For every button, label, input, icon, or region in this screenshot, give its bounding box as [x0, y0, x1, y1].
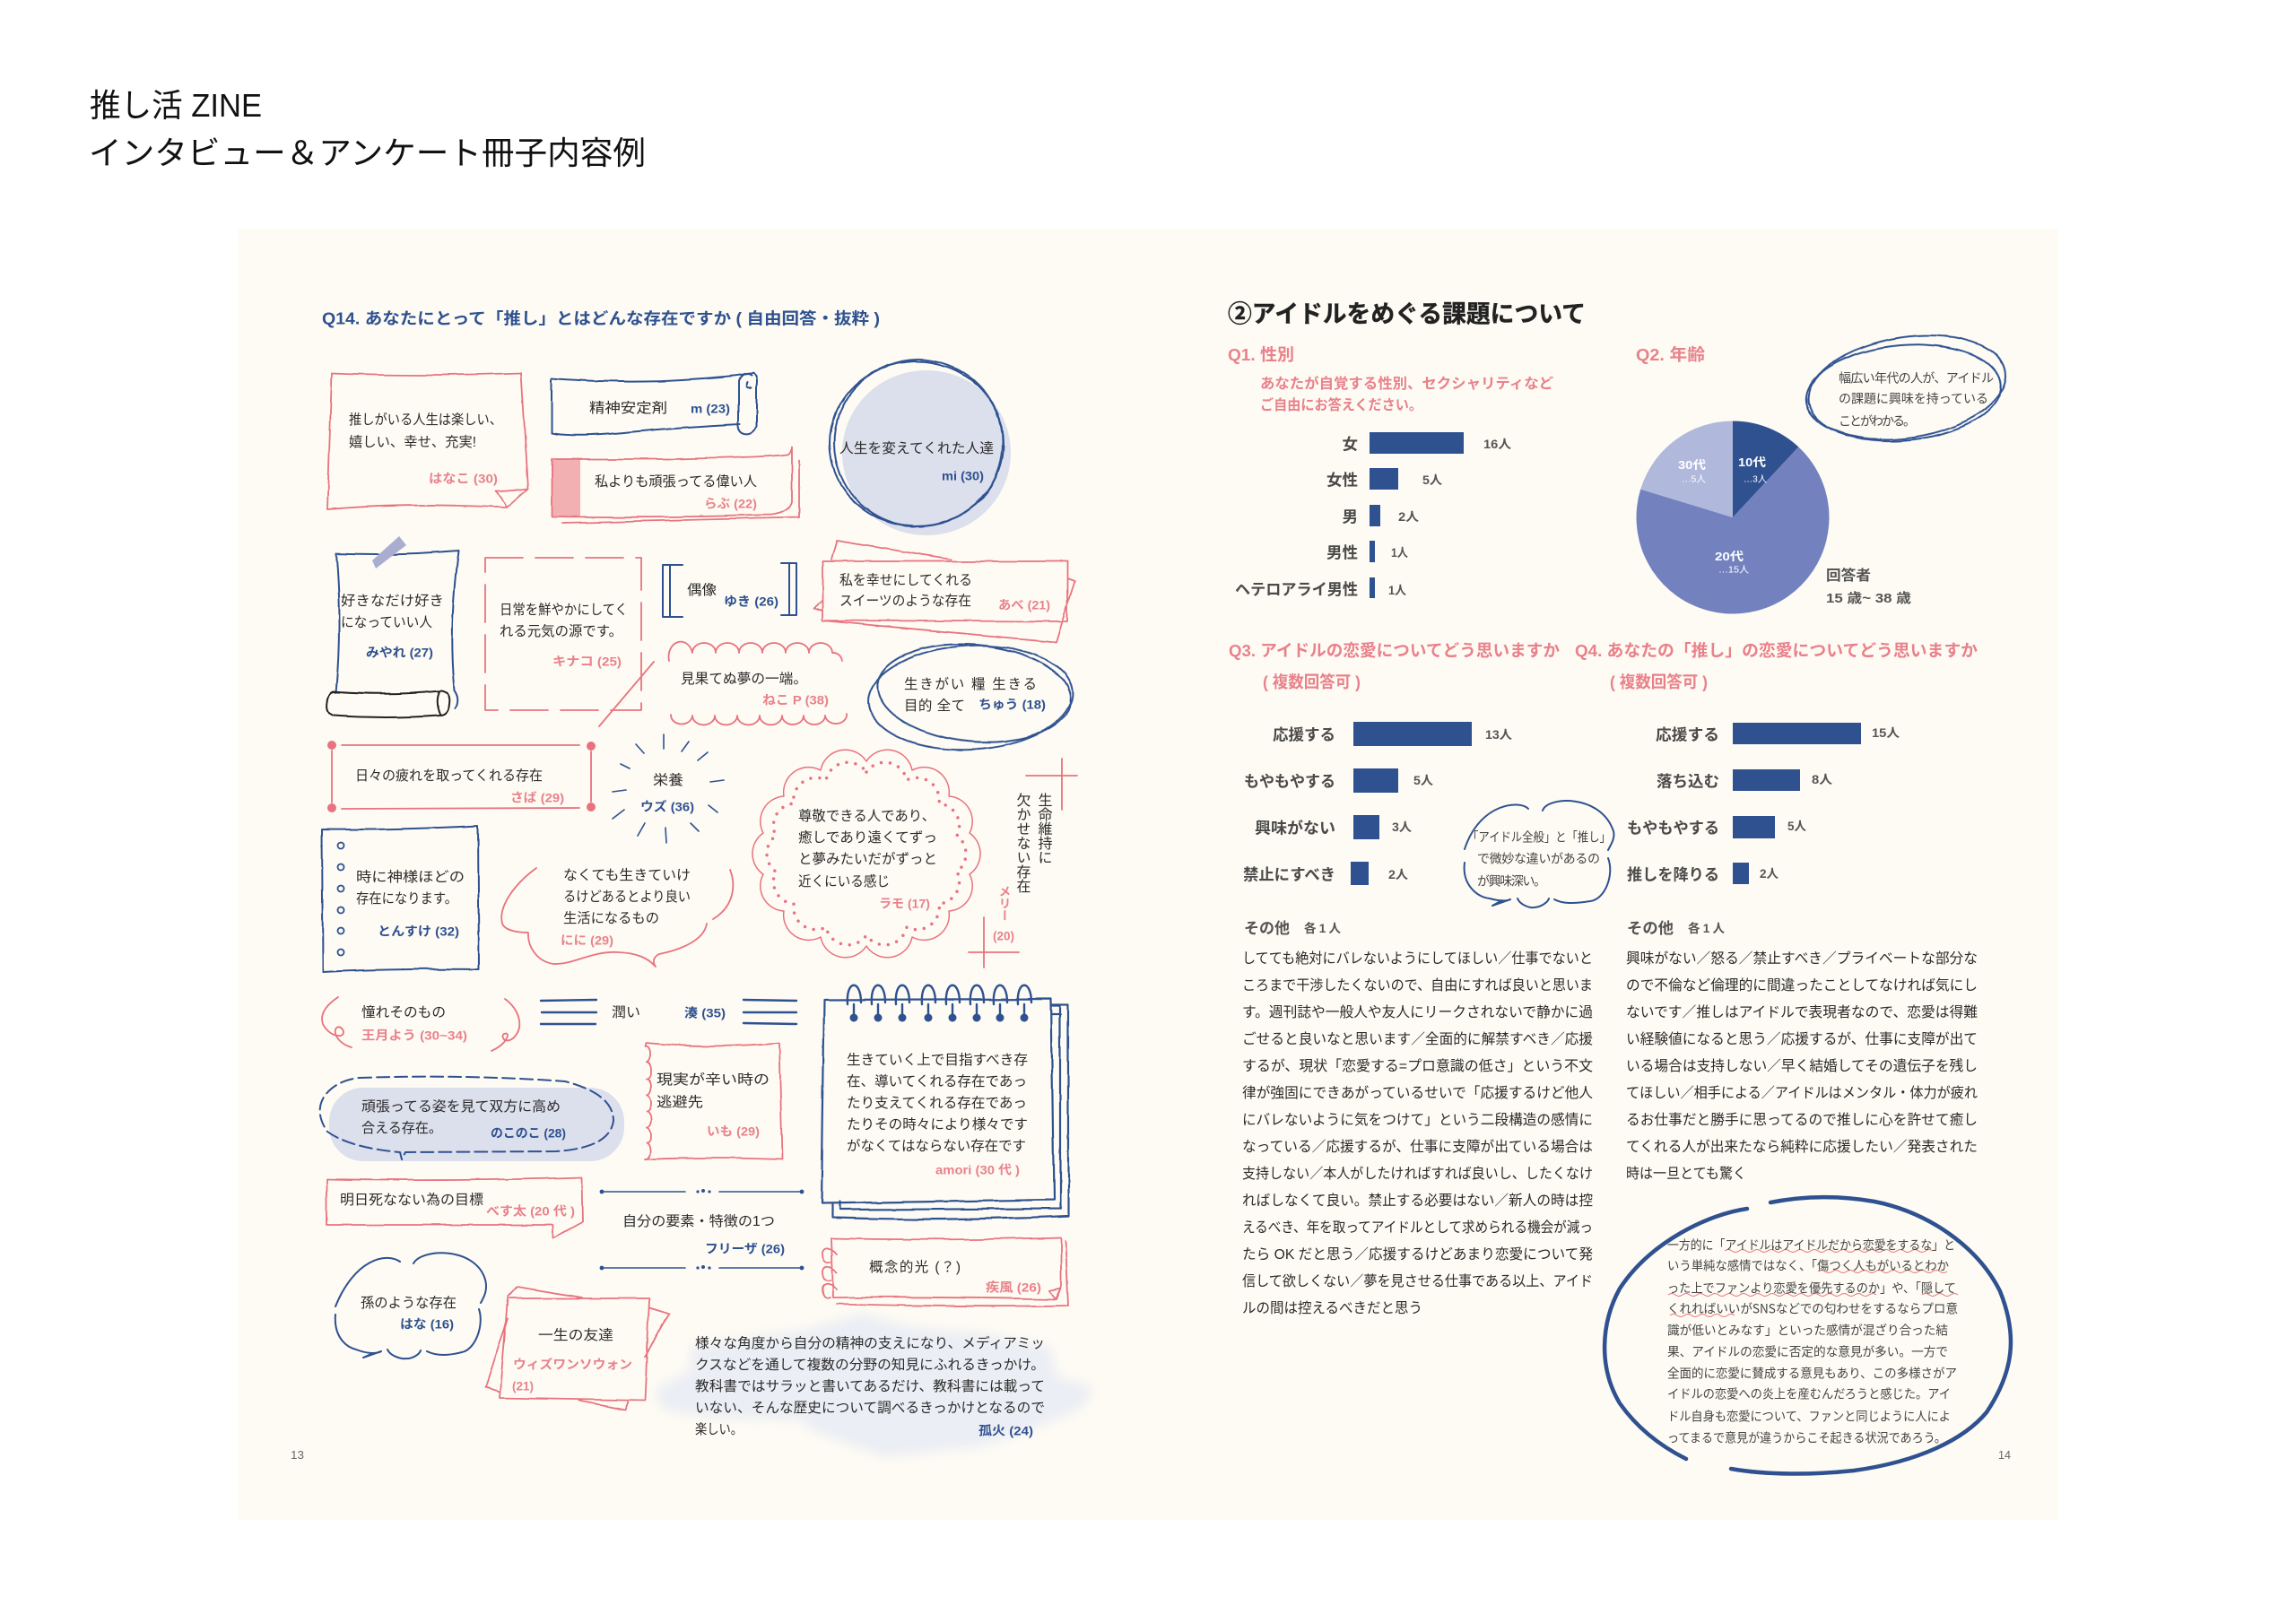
- panel: Q2 age: [1636, 345, 1911, 614]
- card: ちゅう double oval: ちゅう (18): [978, 698, 1046, 712]
- card: mi circle: [826, 352, 1011, 535]
- card: のこのこ dashed bubble on shade: [320, 1077, 624, 1161]
- text block: Q3 other answers: たら OK だと思う／応援するけどあまり恋愛について発: [1242, 1246, 1593, 1263]
- heading: Q14: Q14. あなたにとって「推し」とはどんな存在ですか ( 自由回答・抜粋 ): [322, 308, 880, 328]
- bar chart: gender: 女性: [1326, 472, 1358, 490]
- panel: Q1 gender: Q1. 性別: [1228, 345, 1294, 364]
- card: ウィズワンソウォン stacked papers: (21): [512, 1379, 534, 1393]
- card: キナコ dashed box: れる元気の源です。: [500, 623, 622, 639]
- pie chart: age: 30代: [1678, 458, 1706, 472]
- card: フリーザ ruled lines: [600, 1189, 804, 1270]
- bar chart: gender: 1人: [1388, 584, 1406, 597]
- callout: large handwritten oval summary: イドルの恋愛への炎上を産むんだろうと感じた。アイ: [1667, 1384, 1951, 1402]
- card: mi circle: 人生を変えてくれた人達: [839, 440, 994, 456]
- card: らぶ: 私よりも頑張ってる偉い人: [595, 473, 757, 490]
- bar chart: gender: ヘテロアライ男性: [1235, 581, 1358, 599]
- bar chart: gender: 1人: [1391, 546, 1408, 560]
- callout: large handwritten oval summary: 全面的に恋愛に賛成する意見もあり、この多様さがア: [1667, 1365, 1957, 1383]
- card: ラモ scalloped cloud: 尊敬できる人であり、: [798, 808, 935, 824]
- card: あべ stacked papers: スイーツのような存在: [839, 593, 971, 609]
- bar chart: gender: 男: [1342, 508, 1358, 525]
- card: キナコ dashed box: 日常を鮮やかにしてく: [500, 602, 628, 618]
- text block: Q3 other answers: なっている／応援するが、仕事に支障が出ている場合は: [1242, 1139, 1593, 1155]
- callout: large handwritten oval summary: 識が低いとみなす」といった感情が混ざり合った結: [1667, 1322, 1948, 1340]
- callout: cloud comment: で微妙な違いがあるの: [1477, 850, 1600, 868]
- text block: Q3 other answers: ればしなくて良い。禁止する必要はない／新人の時は控: [1242, 1193, 1593, 1209]
- card: のこのこ dashed bubble on shade: のこのこ (28): [491, 1126, 566, 1141]
- text block: Q3 other answers: ころまで干渉したくないので、自由にすれば良いと思いま: [1242, 977, 1593, 994]
- card: amori spiral notebook: amori (30 代 ): [935, 1162, 1020, 1176]
- card: amori spiral notebook: 生きていく上で目指すべき存: [847, 1052, 1028, 1068]
- pie chart: age: 10代: [1738, 456, 1766, 469]
- bar chart: Q3: 2人: [1388, 868, 1409, 881]
- card: 湊 three-line rules: [541, 1000, 796, 1024]
- bar chart: Q4: 推しを降りる: [1627, 866, 1719, 884]
- panel: booklet spread background: [238, 229, 2058, 1520]
- panel: Q3: [1229, 641, 1560, 885]
- card: あべ stacked papers: 私を幸せにしてくれる: [839, 572, 972, 588]
- card: いも torn-edge note: 逃避先: [657, 1094, 703, 1110]
- card: キナコ dashed box: キナコ (25): [552, 655, 622, 669]
- card: べす太 ribbon: 明日死なない為の目標: [340, 1192, 483, 1208]
- text block: Q4 other answers: てほしい／相手による／アイドルはメンタル・体力が疲れ: [1626, 1085, 1978, 1101]
- card: いも torn-edge note: 現実が辛い時の: [657, 1072, 770, 1088]
- panel: Q1 gender: [1228, 345, 1553, 599]
- card: はなこ: 嬉しい、幸せ、充実!: [349, 434, 476, 450]
- card: ウズ radiating lines: ウズ (36): [640, 800, 694, 814]
- bar chart: gender: 2人: [1398, 510, 1420, 524]
- text block: Q3 other answers: 各1人: [1304, 921, 1342, 935]
- card: みやれ paper with tape: になっていい人: [341, 614, 432, 630]
- bar chart: Q3: 応援する: [1273, 726, 1335, 744]
- bar chart: gender: [1235, 432, 1512, 599]
- text block: Q3 other answers: す。週刊誌や一般人や友人にリークされないで静かに過: [1242, 1004, 1593, 1020]
- card: ウィズワンソウォン stacked papers: ウィズワンソウォン: [513, 1358, 632, 1372]
- pie chart: age: …15人: [1718, 565, 1750, 576]
- text block: Q3 other answers: [1242, 920, 1593, 1316]
- text block: Q3 other answers: えるべき、年を取ってアイドルとして求められる機会が減っ: [1242, 1219, 1593, 1236]
- card: ウズ radiating lines: 栄養: [653, 772, 683, 788]
- card: 疾風 ringed note: [822, 1237, 1068, 1306]
- bar chart: Q3: 興味がない: [1255, 820, 1335, 838]
- heading: section 2: ②アイドルをめぐる課題について: [1228, 301, 1586, 328]
- card: とんすけ notepad: 存在になります。: [356, 890, 457, 907]
- text block: Q4 other answers: ないです／推しはアイドルで表現者なので、恋愛は得難: [1626, 1004, 1978, 1020]
- card: みやれ paper with tape: [327, 536, 458, 717]
- card: いも torn-edge note: [645, 1043, 782, 1159]
- panel: Q4: ( 複数回答可 ): [1610, 673, 1708, 691]
- card: 弧火 long answer on shade: クスなどを通して複数の分野の知見にふれるきっかけ。: [695, 1357, 1045, 1373]
- card: 湊 three-line rules: 潤い: [612, 1004, 640, 1020]
- text block: Q3 other answers: にバレないように気をつけて」という二段構造の感情に: [1242, 1112, 1593, 1128]
- title: [89, 87, 646, 171]
- card: メリー vertical text with crosshairs: [969, 759, 1077, 968]
- card: 王月よう curly parentheses: [322, 997, 519, 1051]
- card: みやれ paper with tape: 好きなだけ好き: [341, 593, 444, 609]
- card: ちゅう double oval: [865, 637, 1075, 755]
- card: フリーザ ruled lines: 自分の要素・特徴の1つ: [622, 1213, 775, 1229]
- bar chart: gender: 5人: [1422, 473, 1443, 487]
- card: ラモ scalloped cloud: ラモ (17): [879, 897, 930, 911]
- text block: Q3 other answers: ごせると良いなと思います／全面的に解禁すべき／応援: [1242, 1031, 1593, 1047]
- text block: Q4 other answers: [1626, 920, 1978, 1182]
- bar chart: Q4: 落ち込む: [1657, 773, 1719, 791]
- card: さば pinned frame: [327, 741, 596, 812]
- card: 弧火 long answer on shade: 楽しい。: [695, 1421, 743, 1437]
- text block: Q4 other answers: い経験値になると思う／応援するが、仕事に支障が出て: [1626, 1031, 1978, 1047]
- callout: large handwritten oval summary: ドル自身も恋愛について、ファンと同じように人によ: [1667, 1408, 1951, 1426]
- text block: Q4 other answers: ので不倫など倫理的に間違ったことしてなければ気にし: [1626, 977, 1978, 994]
- text block: Q3 other answers: ルの間は控えるべきだと思う: [1242, 1300, 1422, 1316]
- bar chart: Q4: 8人: [1812, 773, 1833, 786]
- card: ラモ scalloped cloud: 癒しであり遠くてずっ: [798, 829, 937, 846]
- callout: large handwritten oval summary: くれればいいがSNSなどでの匂わせをするならプロ意: [1667, 1300, 1958, 1318]
- text block: Q3 other answers: 信して欲しくない／夢を見させる仕事である以上、アイド: [1242, 1273, 1593, 1289]
- card: べす太 ribbon: べす太 (20 代 ): [486, 1203, 575, 1218]
- text block: Q3 other answers: するが、現状「恋愛する=プロ意識の低さ」という不文: [1242, 1058, 1593, 1074]
- callout: age comment oval: の課題に興味を持っている: [1839, 389, 1988, 407]
- card: とんすけ notepad: とんすけ (32): [378, 924, 459, 938]
- card: にに speech bubble: なくても生きていけ: [563, 867, 691, 883]
- text block: Q4 other answers: いる場合は支持しない／早く結婚してその遺伝子を残し: [1626, 1058, 1978, 1074]
- card: 弧火 long answer on shade: 孤火 (24): [978, 1424, 1033, 1438]
- card: amori spiral notebook: [822, 985, 1068, 1219]
- card: らぶ: [552, 447, 799, 523]
- card: メリー vertical text with crosshairs: 欠かせない存在: [1013, 793, 1031, 893]
- panel: Q1 gender: ご自由にお答えください。: [1260, 396, 1422, 413]
- card: ねこP scallop: ねこ P (38): [762, 692, 829, 707]
- callout: large handwritten oval summary: [1605, 1197, 2011, 1474]
- card: ウィズワンソウォン stacked papers: [485, 1287, 669, 1410]
- panel: Q1 gender: あなたが自覚する性別、セクシャリティなど: [1260, 375, 1553, 392]
- card: べす太 ribbon: [326, 1177, 583, 1238]
- card: m scroll: 精神安定剤: [589, 400, 667, 416]
- bar chart: Q4: [1627, 723, 1900, 884]
- card: とんすけ notepad: 時に神様ほどの: [356, 869, 465, 885]
- callout: age comment oval: [1801, 322, 2013, 453]
- card: いも torn-edge note: いも (29): [707, 1124, 760, 1139]
- bar chart: Q3: 禁止にすべき: [1243, 866, 1335, 884]
- callout: age comment oval: 幅広い年代の人が、アイドル: [1839, 369, 1994, 387]
- bar chart: Q4: 応援する: [1656, 726, 1719, 744]
- bar chart: Q4: もやもやする: [1627, 820, 1719, 838]
- card: にに speech bubble: [501, 867, 733, 967]
- card: にに speech bubble: 生活になるもの: [563, 910, 659, 926]
- panel: Q4: Q4. あなたの「推し」の恋愛についてどう思いますか: [1575, 641, 1979, 660]
- pie chart: age: …3人: [1744, 473, 1767, 484]
- card: みやれ paper with tape: みやれ (27): [366, 646, 433, 660]
- card: amori spiral notebook: たり支えてくれる存在であっ: [847, 1095, 1027, 1111]
- title: 推し活 ZINE: [90, 87, 262, 124]
- page number 14: 14: [1998, 1448, 2011, 1462]
- panel: Q4: [1575, 641, 1979, 884]
- card: キナコ dashed box: [485, 558, 654, 726]
- callout: cloud comment: が興味深い。: [1477, 872, 1546, 890]
- bar chart: Q4: 2人: [1760, 867, 1779, 881]
- card: にに speech bubble: にに (29): [561, 933, 613, 947]
- card: amori spiral notebook: たりその時々により様々です: [847, 1116, 1028, 1133]
- card: ちゅう double oval: 目的 全て: [904, 698, 965, 714]
- card: 疾風 ringed note: 概念的光 (？): [869, 1259, 961, 1275]
- card: ゆき brackets: 偶像: [687, 582, 717, 598]
- card: はなこ: はなこ (30): [429, 472, 498, 486]
- card: ねこP scallop: 見果てぬ夢の一端。: [681, 671, 807, 687]
- callout: large handwritten oval summary: ってまるで意見が違うからこそ起きる状況であろう。: [1667, 1429, 1946, 1447]
- card: 王月よう curly parentheses: 憧れそのもの: [361, 1004, 446, 1020]
- card: ちゅう double oval: 生きがい 糧 生きる: [904, 676, 1037, 692]
- bar chart: gender: 16人: [1483, 438, 1512, 451]
- card: 疾風 ringed note: 疾風 (26): [986, 1280, 1041, 1295]
- callout: cloud comment: [1465, 801, 1613, 907]
- text block: Q4 other answers: るお仕事だと勝手に思ってるので推しに心を許せて癒し: [1626, 1112, 1978, 1128]
- text block: Q4 other answers: 時は一旦とても驚く: [1626, 1166, 1746, 1182]
- card: のこのこ dashed bubble on shade: 合える存在。: [361, 1120, 442, 1136]
- bar chart: Q4: 5人: [1787, 820, 1806, 833]
- card: ラモ scalloped cloud: と夢みたいだがずっと: [798, 851, 937, 867]
- callout: large handwritten oval summary: った上でファンより恋愛を優先するのか」や、「隠して: [1667, 1279, 1956, 1297]
- card: あべ stacked papers: あべ (21): [998, 597, 1050, 612]
- card: はな cloud: 孫のような存在: [361, 1295, 457, 1311]
- title: インタビュー＆アンケート冊子内容例: [89, 135, 646, 171]
- card: ラモ scalloped cloud: 近くにいる感じ: [798, 873, 890, 890]
- text block: Q4 other answers: その他: [1627, 920, 1674, 937]
- card: さば pinned frame: 日々の疲れを取ってくれる存在: [355, 768, 543, 784]
- page number 13: 13: [291, 1448, 304, 1462]
- card: はな cloud: はな (16): [400, 1316, 454, 1331]
- card: さば pinned frame: さば (29): [510, 791, 564, 805]
- card: ゆき brackets: ゆき (26): [724, 594, 778, 608]
- bar chart: gender: 男性: [1326, 543, 1358, 561]
- card: あべ stacked papers: [813, 541, 1074, 642]
- card: 弧火 long answer on shade: 教科書ではサラッと書いてあるだけ、教科書には載って: [695, 1378, 1045, 1394]
- pie chart: age: 20代: [1715, 550, 1744, 563]
- callout: cloud comment: 「アイドル全般」と「推し」: [1467, 829, 1611, 846]
- panel: Q3: ( 複数回答可 ): [1263, 673, 1361, 691]
- bar chart: Q4: 15人: [1872, 726, 1900, 740]
- card: ねこP scallop: [669, 642, 847, 725]
- card: メリー vertical text with crosshairs: 生命維持に: [1035, 793, 1053, 864]
- card: フリーザ ruled lines: フリーザ (26): [705, 1241, 785, 1255]
- card: 王月よう curly parentheses: 王月よう (30~34): [361, 1028, 467, 1042]
- card: 湊 three-line rules: 湊 (35): [684, 1006, 726, 1020]
- card: 弧火 long answer on shade: いない、そんな歴史について調べるきっかけとなるので: [695, 1400, 1045, 1416]
- text block: Q3 other answers: 支持しない／本人がしたければすれば良いし、したくなけ: [1242, 1166, 1593, 1182]
- card: amori spiral notebook: がなくてはならない存在です: [847, 1138, 1026, 1154]
- card: m scroll: [552, 372, 757, 435]
- bar chart: Q3: 5人: [1413, 774, 1434, 787]
- card: amori spiral notebook: 在、導いてくれる存在であっ: [847, 1073, 1027, 1089]
- callout: large handwritten oval summary: いう単純な感情ではなく、「傷つく人もがいるとわか: [1667, 1257, 1949, 1275]
- card: はなこ: [327, 373, 528, 509]
- card: m scroll: m (23): [691, 402, 730, 416]
- text block: Q3 other answers: 律が強固にできあがっているせいで「応援するけど他人: [1242, 1085, 1593, 1101]
- card: らぶ: らぶ (22): [704, 497, 757, 511]
- text block: Q4 other answers: 興味がない／怒る／禁止すべき／プライベートな部分な: [1626, 950, 1978, 967]
- card: ウズ radiating lines: [613, 734, 724, 843]
- bar chart: gender: 女: [1342, 436, 1358, 454]
- card: mi circle: mi (30): [942, 468, 984, 482]
- card: とんすけ notepad: [322, 826, 479, 972]
- callout: large handwritten oval summary: 果、アイドルの恋愛に否定的な意見が多い。一方で: [1667, 1343, 1948, 1361]
- text block: Q4 other answers: てくれる人が出来たなら純粋に応援したい／発表された: [1626, 1139, 1978, 1155]
- panel: Q2 age: Q2. 年齢: [1636, 345, 1706, 364]
- pie chart: age: …5人: [1682, 473, 1706, 484]
- pie chart: age: [1637, 421, 1830, 614]
- panel: Q2 age: 15 歳~ 38 歳: [1826, 591, 1911, 606]
- bar chart: Q3: 3人: [1392, 820, 1413, 834]
- callout: large handwritten oval summary: 一方的に「アイドルはアイドルだから恋愛をするな」と: [1667, 1236, 1955, 1254]
- bar chart: Q3: もやもやする: [1244, 773, 1335, 791]
- bar chart: Q3: [1243, 722, 1513, 885]
- card: ラモ scalloped cloud: [752, 750, 980, 958]
- text block: Q3 other answers: その他: [1244, 920, 1290, 937]
- text block: Q3 other answers: してても絶対にバレないようにしてほしい／仕事でないと: [1242, 950, 1593, 967]
- callout: age comment oval: ことがわかる。: [1839, 412, 1916, 430]
- card: はなこ: 推しがいる人生は楽しい、: [349, 412, 502, 428]
- card: メリー vertical text with crosshairs: (20): [993, 929, 1014, 943]
- card: ウィズワンソウォン stacked papers: 一生の友達: [538, 1327, 613, 1343]
- card: はな cloud: [335, 1253, 486, 1358]
- panel: Q2 age: 回答者: [1826, 567, 1871, 584]
- card: にに speech bubble: るけどあるとより良い: [563, 889, 691, 905]
- card: 弧火 long answer on shade: 様々な角度から自分の精神の支えになり、メディアミッ: [695, 1334, 1045, 1351]
- card: 弧火 long answer on shade: [662, 1320, 1086, 1451]
- card: のこのこ dashed bubble on shade: 頑張ってる姿を見て双方に高め: [361, 1098, 561, 1115]
- card: メリー vertical text with crosshairs: メリー: [997, 885, 1010, 922]
- panel: Q3: Q3. アイドルの恋愛についてどう思いますか: [1229, 641, 1560, 660]
- bar chart: Q3: 13人: [1485, 728, 1513, 742]
- text block: Q4 other answers: 各1人: [1688, 921, 1726, 935]
- card: ゆき brackets: [663, 563, 796, 617]
